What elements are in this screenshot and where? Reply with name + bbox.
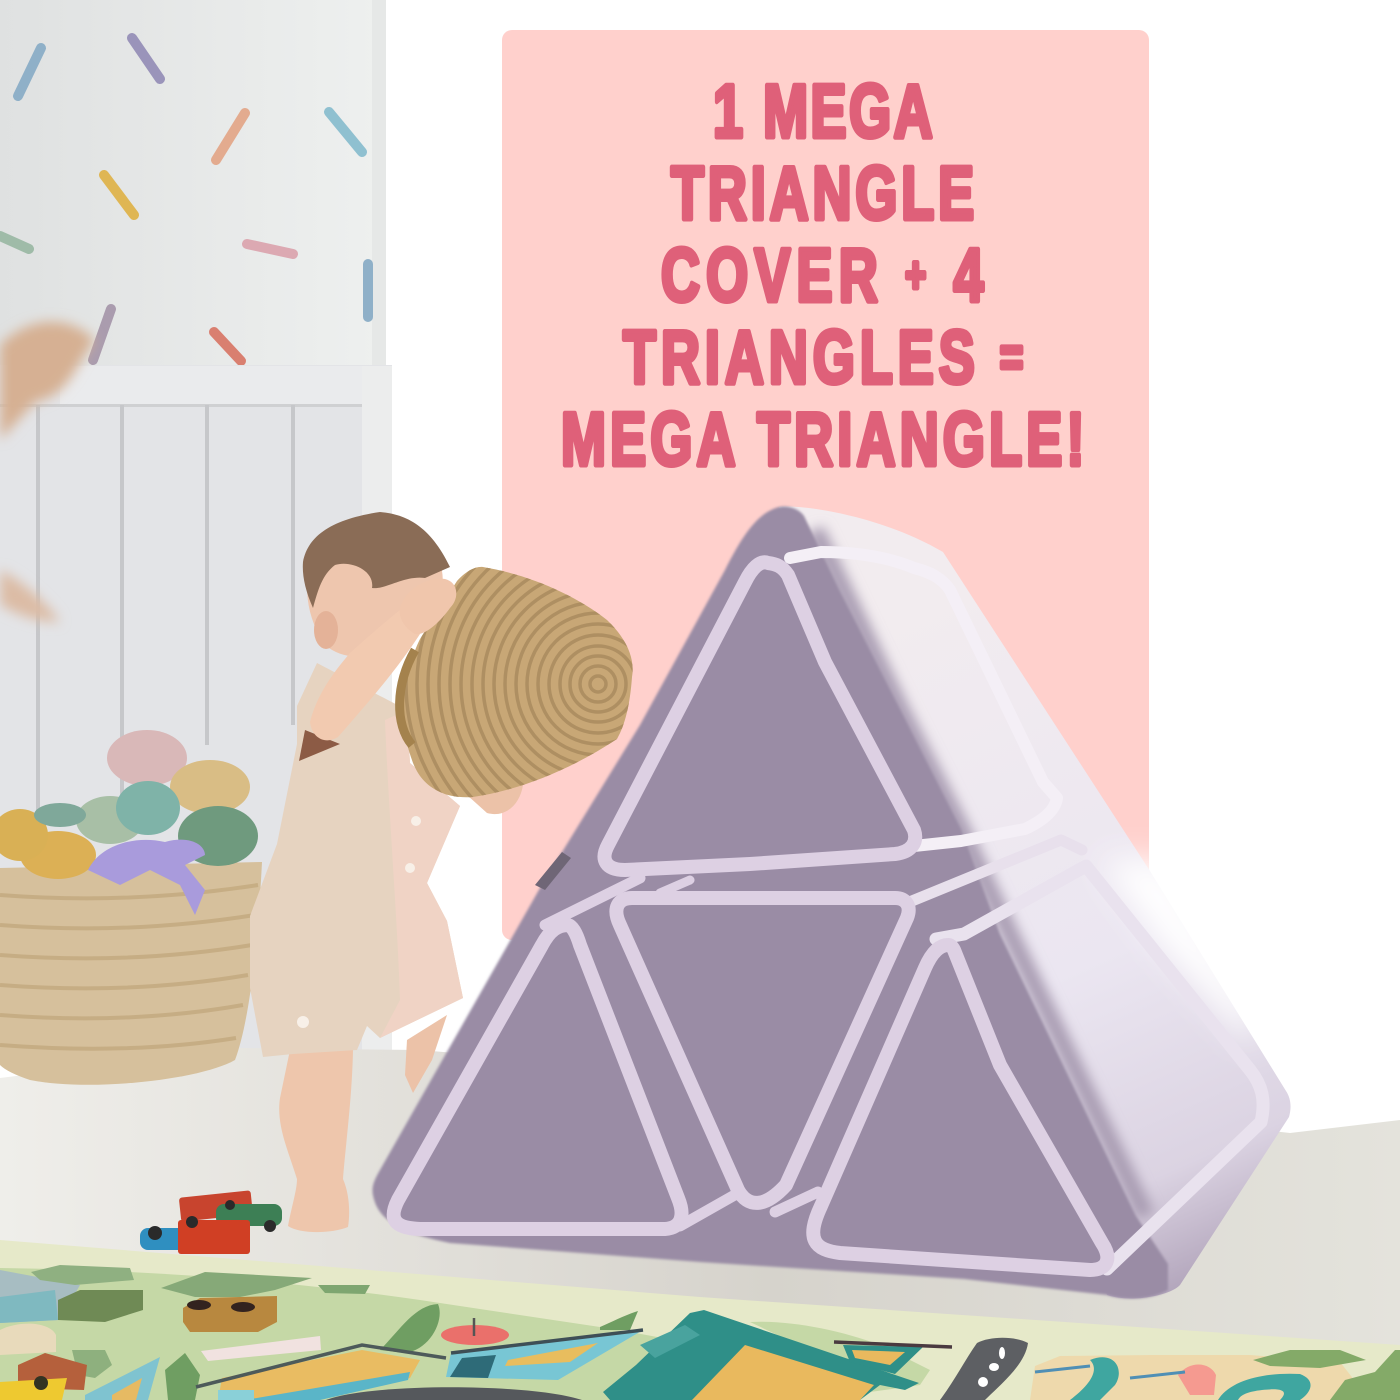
pink panel xyxy=(502,30,1149,940)
baby xyxy=(250,512,523,1232)
playground xyxy=(1030,1355,1370,1400)
hair xyxy=(303,512,450,608)
heading: TRIANGLE xyxy=(671,151,974,235)
head xyxy=(307,527,443,656)
left triangle xyxy=(394,925,682,1229)
mat toy car xyxy=(183,1296,277,1332)
ear xyxy=(314,611,338,649)
top triangle xyxy=(605,562,915,870)
connector lines xyxy=(545,878,640,925)
fabric tag xyxy=(535,852,571,890)
romper xyxy=(250,663,463,1057)
cushion front face xyxy=(373,507,1168,1299)
woven basket on head xyxy=(395,566,633,798)
hand xyxy=(400,579,456,634)
triangle outlines xyxy=(394,562,1107,1270)
heading: 4 xyxy=(932,233,984,317)
romper placket xyxy=(380,710,463,1038)
mat left scenery xyxy=(0,1265,643,1400)
heading xyxy=(561,69,1084,481)
road xyxy=(940,1338,1028,1400)
middle triangle xyxy=(616,898,909,1203)
heading: MEGA TRIANGLE! xyxy=(561,397,1084,481)
wall with confetti decals xyxy=(0,0,386,370)
right triangle xyxy=(813,945,1107,1270)
toy basket xyxy=(0,730,262,1085)
cushion side face xyxy=(779,507,1291,1298)
heading: COVER xyxy=(661,233,878,317)
heading: 1 MEGA xyxy=(713,69,933,153)
play mat xyxy=(0,1240,1400,1400)
blue house xyxy=(446,1330,643,1380)
yellow house xyxy=(218,1350,420,1400)
mega triangle cushion xyxy=(373,507,1291,1299)
side face fade xyxy=(1100,860,1255,1050)
toy cars xyxy=(140,1190,282,1254)
heading: + xyxy=(905,248,926,303)
front leg xyxy=(279,1050,353,1232)
mat right scenery xyxy=(603,1310,1400,1400)
wall decal strokes xyxy=(0,38,368,361)
carpet floor xyxy=(0,1048,1400,1400)
side face outlines xyxy=(790,552,1263,1269)
heading: = xyxy=(1000,327,1023,389)
far arm xyxy=(467,785,523,814)
dark armpit xyxy=(299,730,340,761)
road xyxy=(326,1387,582,1400)
plush toys xyxy=(0,730,258,915)
side edge shading xyxy=(815,530,1146,1216)
rear leg xyxy=(405,1015,447,1093)
pampas grass xyxy=(0,322,95,622)
romper buttons xyxy=(297,816,421,1028)
near arm xyxy=(310,610,420,740)
heading: TRIANGLES xyxy=(623,315,975,399)
wainscot panelling xyxy=(0,365,392,1065)
